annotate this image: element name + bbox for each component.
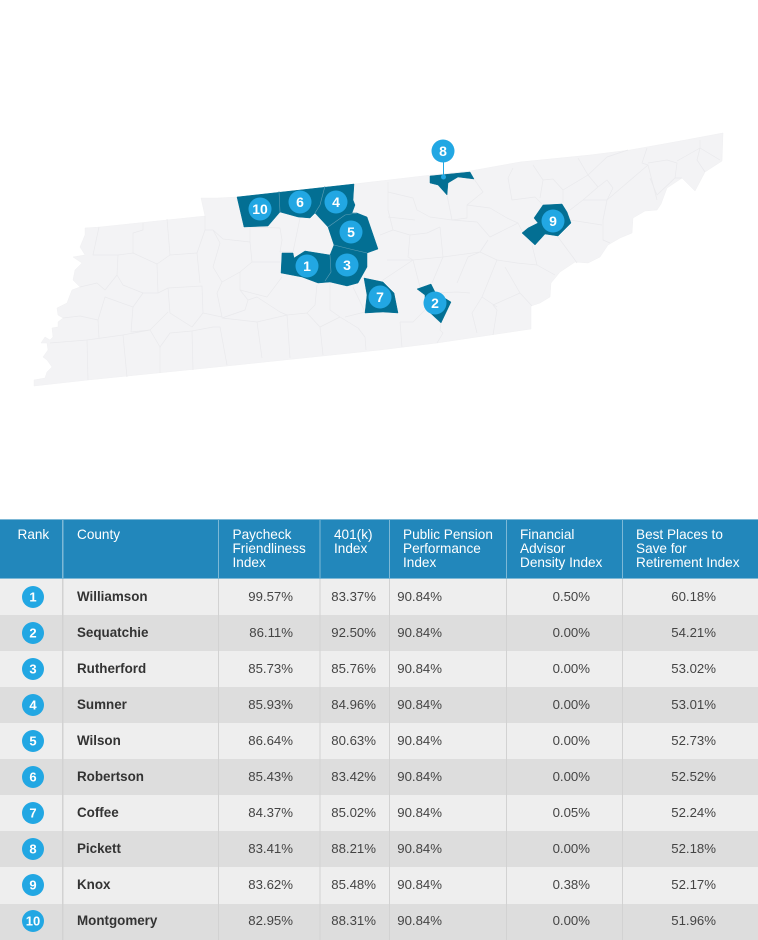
table header: Index <box>232 555 266 570</box>
row 4: 4 <box>29 698 37 712</box>
inner borders between highlighted counties <box>279 186 367 281</box>
row 3: 3 <box>29 662 37 676</box>
highlighted counties <box>237 172 571 323</box>
row 4: Sumner <box>77 697 128 712</box>
table header: County <box>77 527 120 542</box>
row 5: 86.64% <box>248 733 293 748</box>
county: Knox <box>522 204 571 245</box>
row 8 <box>0 831 758 867</box>
row 4: 53.01% <box>671 697 716 712</box>
row 5 <box>0 723 758 759</box>
row 7: 90.84% <box>397 805 442 820</box>
row 3: Rutherford <box>77 661 146 676</box>
row 2: 90.84% <box>397 625 442 640</box>
county borders <box>50 140 720 380</box>
row 8: 0.00% <box>553 841 590 856</box>
row 5: 80.63% <box>331 733 376 748</box>
table header: Public Pension <box>403 527 493 542</box>
row 2: 2 <box>29 626 37 640</box>
table header: Paycheck <box>232 527 292 542</box>
row 1: 90.84% <box>397 589 442 604</box>
row 8: 90.84% <box>397 841 442 856</box>
marker 4 <box>324 190 348 214</box>
row 3: 0.00% <box>553 661 590 676</box>
row 10: 82.95% <box>248 913 293 928</box>
row 7 <box>0 795 758 831</box>
map of Tennessee counties <box>34 133 723 386</box>
row 10: Montgomery <box>77 913 158 928</box>
row 3 <box>0 651 758 687</box>
row 2: 92.50% <box>331 625 376 640</box>
marker 7 <box>368 286 392 308</box>
row 1: 60.18% <box>671 589 716 604</box>
row 7: 7 <box>29 806 37 820</box>
row 9: 52.17% <box>671 877 716 892</box>
row 3: 85.76% <box>331 661 376 676</box>
row 2: Sequatchie <box>77 625 148 640</box>
row 9: 83.62% <box>248 877 293 892</box>
row 5: 90.84% <box>397 733 442 748</box>
marker 1 <box>296 254 318 278</box>
marker 6: 6 <box>296 194 304 210</box>
row 2 <box>0 615 758 651</box>
table <box>0 519 758 940</box>
row 3: 90.84% <box>397 661 442 676</box>
table header: Financial <box>520 527 574 542</box>
table header: Retirement Index <box>636 555 740 570</box>
marker 3: 3 <box>343 257 351 273</box>
marker 5: 5 <box>347 224 355 240</box>
row 5: 5 <box>29 734 37 748</box>
table header: 401(k) <box>334 527 373 542</box>
marker 2: 2 <box>431 295 439 311</box>
county: Sequatchie <box>417 284 451 323</box>
table header: Performance <box>403 541 481 556</box>
row 10: 88.31% <box>331 913 376 928</box>
county: Pickett <box>430 172 474 195</box>
row 7: 84.37% <box>248 805 293 820</box>
table header: Index <box>334 541 367 556</box>
row 9: 0.38% <box>553 877 590 892</box>
row 5: Wilson <box>77 733 121 748</box>
row 3: 85.73% <box>248 661 293 676</box>
row 2: 86.11% <box>249 625 293 640</box>
row 6 <box>0 759 758 795</box>
marker 8 with leader line: 8 <box>439 143 447 159</box>
row 8: Pickett <box>77 841 121 856</box>
row 7: 52.24% <box>671 805 716 820</box>
row 8: 52.18% <box>671 841 716 856</box>
row 1: 99.57% <box>248 589 293 604</box>
state outline <box>34 133 723 386</box>
marker 6 <box>288 190 312 214</box>
row 8: 83.41% <box>248 841 293 856</box>
connected counties: Montgomery, Robertson, Sumner, Wilson, Rutherford, Williamson <box>237 184 378 286</box>
county: Coffee <box>364 278 398 313</box>
row 6: Robertson <box>77 769 144 784</box>
row 9 <box>0 867 758 904</box>
row 4: 85.93% <box>248 697 293 712</box>
row 6: 85.43% <box>248 769 293 784</box>
row 1 <box>0 579 758 615</box>
marker 2 <box>424 292 446 314</box>
row 3: 53.02% <box>671 661 716 676</box>
table header: Advisor <box>520 541 566 556</box>
row 7: 85.02% <box>331 805 376 820</box>
row 6: 0.00% <box>553 769 590 784</box>
row 4: 90.84% <box>397 697 442 712</box>
table header: Index <box>403 555 436 570</box>
row 2: 54.21% <box>671 625 716 640</box>
row 5: 0.00% <box>553 733 590 748</box>
marker 9 <box>542 210 564 232</box>
row 2: 0.00% <box>553 625 590 640</box>
table header <box>0 519 758 579</box>
map markers <box>248 140 564 314</box>
marker 5 <box>340 220 362 244</box>
table header: Save for <box>636 541 687 556</box>
marker 10: 10 <box>252 201 268 217</box>
row 10: 51.96% <box>671 913 716 928</box>
row 9: 9 <box>29 878 37 892</box>
marker 4: 4 <box>332 194 340 210</box>
row 8: 88.21% <box>331 841 376 856</box>
row 1: Williamson <box>77 589 148 604</box>
row 9: Knox <box>77 877 111 892</box>
marker 8 with leader line <box>432 140 454 180</box>
row 7: 0.05% <box>553 805 590 820</box>
row 7: Coffee <box>77 805 119 820</box>
row 6: 6 <box>29 770 37 784</box>
row 6: 90.84% <box>397 769 442 784</box>
row 9: 90.84% <box>397 877 442 892</box>
row 1: 83.37% <box>331 589 376 604</box>
marker 3 <box>336 254 358 276</box>
row 9: 85.48% <box>331 877 376 892</box>
table header: Friendliness <box>232 541 306 556</box>
marker 1: 1 <box>303 258 311 274</box>
table header: Rank <box>18 527 49 542</box>
row 4: 0.00% <box>553 697 590 712</box>
row 6: 52.52% <box>671 769 716 784</box>
row 10: 10 <box>26 914 40 928</box>
row 5: 52.73% <box>671 733 716 748</box>
row 8: 8 <box>29 842 37 856</box>
marker 10 <box>248 198 272 220</box>
row 10 <box>0 904 758 940</box>
marker 9: 9 <box>549 213 557 229</box>
row 10: 90.84% <box>397 913 442 928</box>
row 1: 0.50% <box>553 589 590 604</box>
table header: Density Index <box>520 555 603 570</box>
row 1: 1 <box>29 590 37 604</box>
row 4: 84.96% <box>331 697 376 712</box>
row 10: 0.00% <box>553 913 590 928</box>
marker 7: 7 <box>376 289 384 305</box>
row 4 <box>0 687 758 723</box>
table header: Best Places to <box>636 527 723 542</box>
row 6: 83.42% <box>331 769 376 784</box>
